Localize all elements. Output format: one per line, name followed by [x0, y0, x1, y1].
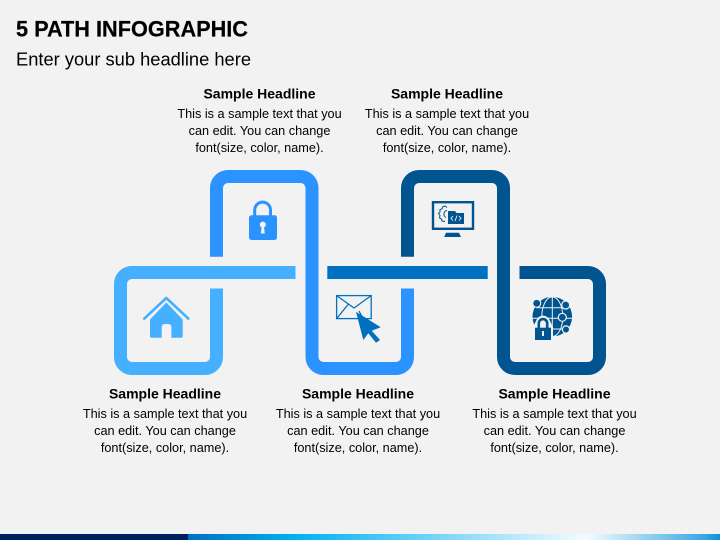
icon: envelope with cursor — [337, 296, 381, 343]
text block: bottom center: can edit. You can change — [287, 424, 429, 438]
text block: top left — [177, 86, 342, 155]
text block: bottom right: Sample Headline — [498, 386, 611, 402]
text block: top right: can edit. You can change — [376, 124, 518, 138]
icon: padlock — [249, 202, 277, 240]
path 4: dark blue — [408, 176, 600, 368]
text block: top right — [365, 86, 529, 155]
text block: top left: font(size, color, name). — [195, 141, 324, 155]
text block: bottom right — [472, 386, 637, 455]
text block: bottom left: font(size, color, name). — [101, 441, 229, 455]
text block: bottom center: This is a sample text that you — [276, 407, 440, 421]
text block: top right: font(size, color, name). — [383, 141, 511, 155]
icon: house — [144, 298, 188, 338]
text block: bottom left: This is a sample text that you — [83, 407, 247, 421]
text block: bottom right: This is a sample text that you — [472, 407, 637, 421]
text block: bottom right: font(size, color, name). — [490, 441, 619, 455]
text block: top left: can edit. You can change — [189, 124, 330, 138]
text block: top left: This is a sample text that you — [177, 107, 342, 121]
title: 5 PATH INFOGRAPHIC — [16, 17, 248, 42]
icon: globe with padlock — [532, 297, 572, 342]
text block: bottom left: Sample Headline — [109, 386, 221, 402]
icon: monitor with code folder — [433, 202, 473, 237]
subtitle: Enter your sub headline here — [16, 50, 251, 70]
path 2: medium blue — [216, 176, 408, 368]
path 1: light blue — [120, 272, 296, 368]
footer bar — [0, 534, 720, 540]
text block: top left: Sample Headline — [203, 86, 316, 102]
text block: top right: Sample Headline — [391, 86, 503, 102]
text block: bottom center: font(size, color, name). — [294, 441, 422, 455]
text block: bottom right: can edit. You can change — [484, 424, 625, 438]
text block: top right: This is a sample text that you — [365, 107, 529, 121]
text block: bottom center: Sample Headline — [302, 386, 414, 402]
text block: bottom left: can edit. You can change — [94, 424, 236, 438]
text block: bottom left — [83, 386, 247, 455]
path 3: horizontal blue bar — [327, 266, 488, 279]
text block: bottom center — [276, 386, 440, 455]
